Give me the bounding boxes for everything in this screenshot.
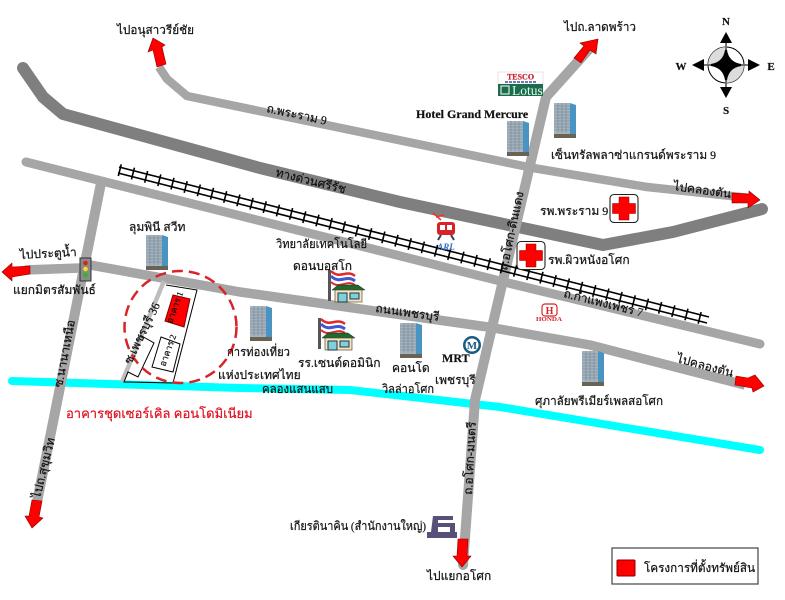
- labels: places: ศุภาลัยพรีเมียร์เพลสอโศก: [535, 394, 663, 409]
- soi Phetchaburi 36: [122, 281, 164, 382]
- compass: [676, 16, 775, 117]
- logo: ARL: [433, 213, 455, 252]
- labels: places: การท่องเที่ยว: [227, 343, 290, 359]
- labels: roads: [51, 101, 645, 495]
- railway: Airport Rail Link: [118, 167, 709, 323]
- labels: destinations: แยกมิตรสัมพันธ์: [13, 283, 96, 297]
- labels: destinations: ไปคลองตัน: [674, 351, 735, 380]
- labels: roads: ถนนเพชรบุรี: [374, 301, 441, 325]
- labels: places: คอนโด: [392, 361, 430, 375]
- labels: places: [129, 107, 716, 533]
- logo: ARL: ARL: [436, 242, 455, 252]
- compass: N: [722, 16, 730, 28]
- labels: places: เซ็นทรัลพลาซ่าแกรนด์พระราม 9: [551, 147, 716, 162]
- logo: Honda: HONDA: [536, 317, 563, 323]
- road: Nana Nuea: [35, 183, 101, 512]
- dashed circle: project area: [124, 271, 236, 383]
- labels: destinations: ไปถ.สุขุมวิท: [29, 436, 59, 501]
- labels: places: วิทยาลัยเทคโนโลยี: [276, 237, 367, 251]
- site plan: อาคาร 2: [157, 333, 178, 368]
- site plan: [122, 281, 197, 383]
- labels: roads: ถ.อโศก-ดินแดง: [496, 190, 527, 272]
- labels: places: รพ.ผิวหนังอโศก: [548, 253, 630, 267]
- arrow: to Asok intersection: [453, 539, 471, 567]
- labels: places: Hotel Grand Mercure: [416, 107, 529, 121]
- road: Kamphaeng Phet 7: [26, 162, 760, 344]
- arrow: to Sukhumvit: [25, 500, 43, 528]
- labels: destinations: ไปถ.ลาดพร้าว: [563, 20, 636, 34]
- arrow: to Pratunam: [2, 263, 30, 281]
- arrow: to Victory Monument: [148, 38, 166, 67]
- labels: roads: ซ.เพชรบุรี 36: [121, 300, 164, 367]
- labels: places: เกียรตินาคิน (สำนักงานใหญ่): [290, 519, 426, 533]
- logo: Tesco Lotus: Lotus: [512, 83, 543, 98]
- buildings: [146, 103, 604, 386]
- logo: Tesco Lotus: [498, 72, 543, 98]
- legend: โครงการที่ตั้งทรัพย์สิน: [644, 559, 755, 575]
- logo: Tesco Lotus: TESCO: [507, 72, 534, 82]
- labels: roads: ถ.พระราม 9: [265, 101, 328, 128]
- road: Rama 9: [159, 67, 750, 198]
- arrow: to Khlong Tan (bottom): [735, 375, 764, 392]
- houses with flag: [318, 270, 365, 350]
- labels: roads: คลองแสนแสบ: [262, 382, 333, 396]
- expressway: Sri Rat: [23, 68, 762, 245]
- labels: places: รพ.พระราม 9: [540, 204, 608, 218]
- labels: places: MRT: [442, 351, 470, 365]
- hospital icons: [517, 194, 638, 270]
- labels: places: แห่งประเทศไทย: [218, 368, 301, 382]
- compass: W: [676, 61, 686, 73]
- labels: places: ดอนบอสโก: [293, 259, 352, 273]
- label: project name: อาคารชุดเซอร์เคิล คอนโดมิเนียม: [66, 406, 253, 422]
- arrow: to Lat Phrao: [574, 39, 598, 63]
- legend: [612, 548, 758, 584]
- labels: places: รร.เซนต์ดอมินิก: [298, 356, 381, 370]
- road: Asok: [463, 48, 590, 565]
- site plan: อาคาร 1: [164, 290, 185, 325]
- traffic light: [80, 258, 91, 281]
- logo: MRT: M: [467, 340, 478, 352]
- canal: Khlong Saen Saep: [12, 381, 760, 450]
- labels: roads: ซ.นานาเหนือ: [51, 319, 78, 389]
- labels: destinations: ไปแยกอโศก: [426, 569, 491, 583]
- labels: destinations: ไปประตูน้ำ: [18, 243, 77, 263]
- labels: destinations: ไปคลองตัน: [672, 179, 732, 201]
- labels: destinations: ไปอนุสาวรีย์ชัย: [116, 23, 194, 38]
- compass: S: [723, 105, 729, 117]
- building 2: [152, 337, 180, 372]
- compass: E: [767, 61, 775, 73]
- labels: places: วิลล่าอโศก: [382, 382, 434, 396]
- labels: places: เพชรบุรี: [435, 373, 476, 388]
- labels: roads: ถ.อโศก-มนตรี: [461, 421, 479, 495]
- building 1: [165, 295, 190, 327]
- labels: roads: ทางด่วนศรีรัช: [274, 165, 347, 196]
- site outline: [124, 285, 197, 383]
- labels: roads: ถ.กำแพงเพชร 7: [562, 286, 645, 320]
- logo: Honda: [536, 304, 563, 323]
- road: Phetchaburi: [25, 265, 745, 385]
- labels: places: ลุมพินี สวีท: [129, 220, 185, 235]
- logo: Kiatnakin: [427, 516, 457, 538]
- arrow: to Khlong Tan (top): [732, 191, 760, 208]
- logo: Honda: H: [546, 306, 554, 317]
- logo: MRT: [463, 336, 481, 354]
